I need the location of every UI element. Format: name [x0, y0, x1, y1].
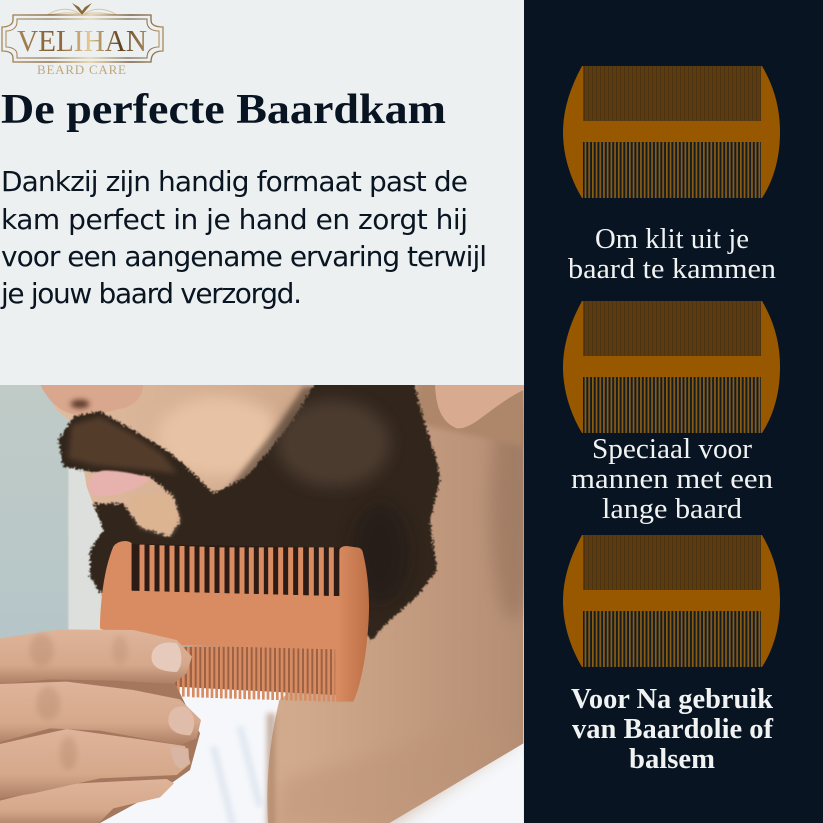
cheek highlight	[157, 397, 283, 477]
hand with four fingers	[0, 629, 201, 823]
caption 1	[568, 223, 777, 285]
body text: Dankzij zijn handig formaat past de	[1, 165, 468, 198]
caption 3	[571, 683, 774, 775]
finger 2	[0, 682, 201, 745]
finger 3	[0, 729, 191, 799]
neck shading	[267, 393, 537, 823]
finger 1	[0, 629, 192, 684]
stubble edge around beard	[226, 385, 314, 487]
logo: Velihan Beard Care: BEARD CARE	[37, 62, 126, 77]
body text: je jouw baard verzorgd.	[0, 277, 302, 310]
page background	[0, 0, 524, 385]
white shirt	[100, 686, 524, 823]
caption 2: mannen met een	[571, 463, 774, 495]
face and neck skin	[38, 380, 523, 823]
caption 2	[571, 433, 774, 525]
right dark panel	[524, 0, 823, 823]
logo: Velihan Beard Care: VELIHAN	[17, 23, 147, 58]
logo: Velihan Beard Care	[2, 3, 163, 77]
comb lower teeth backing	[174, 646, 336, 695]
comb body	[100, 541, 369, 702]
caption 2: Speciaal voor	[592, 433, 752, 465]
caption 3: balsem	[629, 743, 715, 775]
hand shadow base	[0, 679, 200, 823]
chin skin patch	[128, 495, 178, 534]
ear	[417, 380, 523, 447]
finger 4	[0, 779, 174, 823]
comb lower teeth	[177, 646, 335, 702]
caption 3: Voor Na gebruik	[571, 683, 774, 715]
icon: comb 1	[563, 66, 780, 198]
comb upper teeth	[142, 545, 331, 597]
lips	[88, 470, 150, 496]
photo background wall	[0, 380, 523, 823]
nose	[40, 385, 143, 414]
body text	[0, 165, 487, 310]
body text: kam perfect in je hand en zorgt hij	[1, 203, 468, 236]
comb upper slots background	[132, 544, 339, 596]
caption 1: baard te kammen	[568, 253, 777, 285]
icon: comb 2	[563, 301, 780, 433]
title: De perfecte Baardkam	[1, 87, 446, 133]
beard highlights	[68, 400, 410, 603]
caption 1: Om klit uit je	[595, 223, 749, 255]
caption 2: lange baard	[602, 493, 743, 525]
body text: voor een aangename ervaring terwijl	[1, 240, 487, 273]
beard	[58, 380, 440, 640]
caption 3: van Baardolie of	[572, 713, 773, 745]
icon: comb 3	[563, 535, 780, 667]
wooden comb in photo	[100, 541, 369, 702]
photo: man combing his beard	[0, 380, 537, 823]
